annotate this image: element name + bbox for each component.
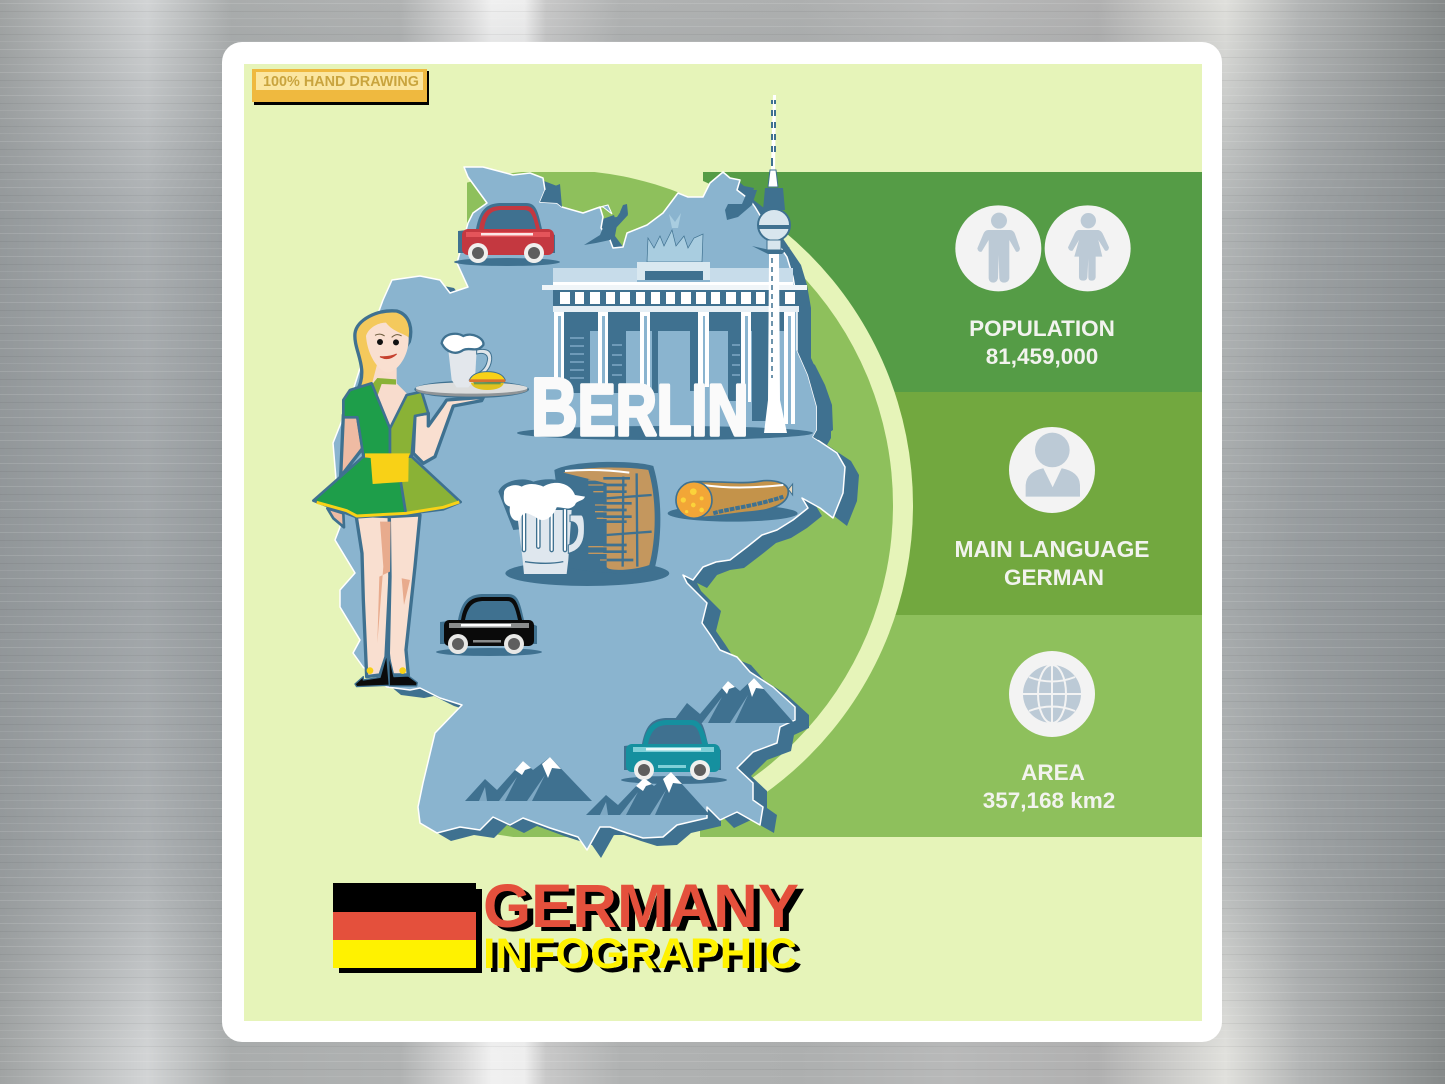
- dress bodice: [343, 383, 390, 456]
- icon: man: [955, 205, 1041, 291]
- area value: 357,168 km2: [983, 788, 1115, 813]
- face: [366, 323, 409, 373]
- car: teal: [621, 718, 727, 784]
- inner pale green page: [244, 64, 1202, 1021]
- burger: [469, 372, 505, 380]
- title: Germany: GERMANY: [489, 876, 805, 944]
- population value: 81,459,000: [986, 344, 1098, 369]
- mug on tray: [448, 350, 477, 387]
- hair: [355, 311, 411, 388]
- far arm: [341, 415, 363, 477]
- panel: area background: [700, 615, 1202, 837]
- title: Infographic: INFOGRAPHIC: [483, 930, 797, 978]
- main language value: GERMAN: [1004, 565, 1104, 590]
- white sticker card: [222, 42, 1222, 1042]
- eyes and mouth: [377, 339, 383, 345]
- waitress: [313, 311, 529, 687]
- tray: [414, 381, 529, 398]
- near arm: [413, 397, 483, 463]
- skirt: [313, 457, 406, 517]
- population heading: POPULATION: [969, 316, 1115, 341]
- TV tower: [752, 95, 790, 433]
- apron: [365, 453, 410, 484]
- choker: [372, 378, 396, 400]
- badge: 100% hand drawing: [252, 69, 429, 105]
- title: Infographic: INFOGRAPHIC: [488, 934, 802, 982]
- car: red: [454, 203, 560, 266]
- legs: [356, 515, 420, 677]
- skirt trim: [317, 502, 459, 516]
- car: black: [436, 594, 542, 656]
- beer barrel: [505, 462, 669, 586]
- badge: 100% hand drawing: 100% HAND DRAWING: [263, 74, 419, 90]
- map of Germany: [333, 167, 859, 858]
- pale ring around the map: [703, 181, 913, 820]
- Brandenburg Gate: [517, 213, 813, 440]
- neck and chest: [372, 363, 408, 428]
- BERLIN label: BERLIN: [531, 361, 748, 453]
- main language heading: MAIN LANGUAGE: [954, 536, 1150, 562]
- title: Germany: GERMANY: [483, 872, 799, 940]
- icon: woman: [1045, 205, 1131, 291]
- German flag: [333, 883, 482, 973]
- hand below skirt: [327, 508, 344, 527]
- panel: main language background: [703, 392, 1202, 615]
- leg shading: [377, 522, 410, 643]
- beer mug: [498, 479, 585, 574]
- panel: population background: [703, 172, 1202, 392]
- mountains: east: [672, 678, 794, 723]
- sausage: [668, 481, 798, 522]
- mountains: south: [586, 772, 710, 815]
- area heading: AREA: [1021, 760, 1085, 785]
- mountains: south-west: [465, 757, 592, 801]
- icon: speaker bust: [1009, 427, 1095, 513]
- green circle behind the map: [467, 172, 893, 837]
- icon: globe: [1009, 651, 1095, 737]
- shoes: [355, 654, 389, 687]
